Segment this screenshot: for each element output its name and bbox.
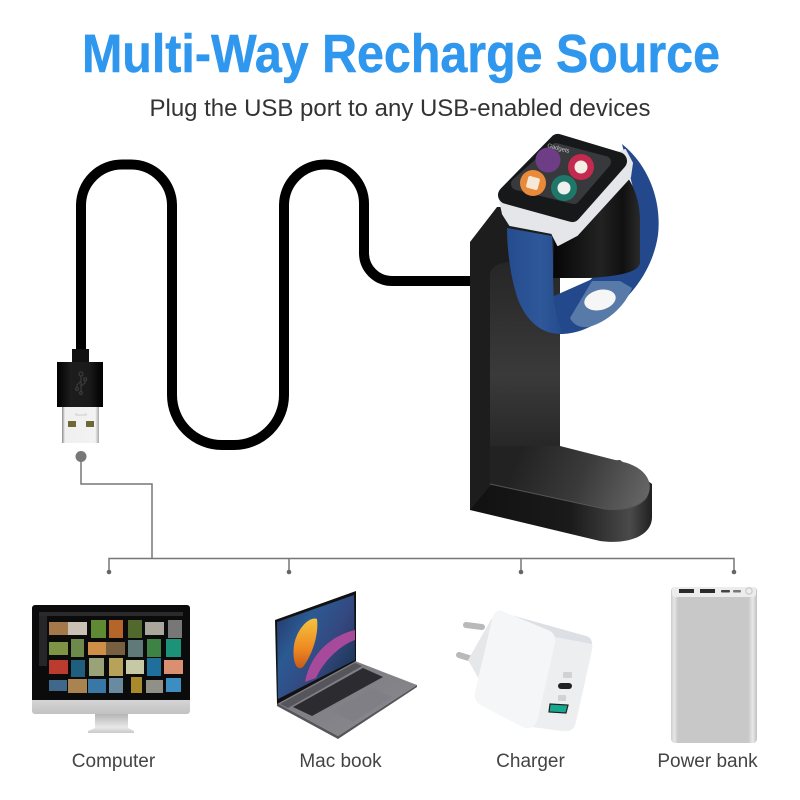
- charger prongs: [459, 625, 482, 659]
- USB-C port: [558, 683, 572, 689]
- screen toolbar and sidebar: [39, 612, 183, 616]
- device: laptop: [275, 591, 417, 739]
- photo thumbnails: [49, 620, 183, 693]
- device: computer: [32, 605, 190, 733]
- USB body: [57, 362, 103, 407]
- USB trident icon: [76, 372, 86, 394]
- blue watch band rear: [545, 144, 659, 334]
- laptop hinge shadow: [280, 663, 362, 708]
- monitor chin: [32, 699, 190, 714]
- micro ports: [721, 590, 730, 592]
- watch silver case: [500, 150, 632, 245]
- label: Power bank: Power bank: [657, 751, 758, 772]
- app icon: hourglass: [536, 148, 560, 172]
- wallpaper swirl: [293, 619, 317, 668]
- label: Mac book: Mac book: [299, 751, 382, 772]
- laptop deck: [277, 661, 417, 736]
- device dots: [107, 570, 736, 574]
- band hole: [582, 286, 618, 314]
- charger side: [500, 612, 592, 731]
- monitor screen: [32, 605, 190, 700]
- laptop wallpaper: [277, 595, 355, 699]
- blue watch band front: [507, 228, 564, 334]
- charger plug base: [468, 618, 500, 681]
- charging stand: [470, 207, 652, 542]
- monitor stand: [88, 714, 134, 733]
- app icon: clock: [551, 175, 577, 201]
- power button: [746, 588, 752, 594]
- power bank body: [671, 587, 757, 743]
- title: Multi-Way Recharge Source: [82, 24, 720, 84]
- USB ports: [679, 589, 694, 593]
- USB metal connector: [62, 406, 99, 443]
- stand column front: [490, 262, 560, 450]
- watch: [500, 143, 632, 245]
- USB plug: [57, 349, 103, 443]
- laptop keyboard: [293, 668, 383, 716]
- label: Computer: Computer: [72, 751, 156, 772]
- USB-A port: [549, 704, 568, 713]
- charger face: [475, 610, 555, 728]
- app icon: checklist: [520, 170, 546, 196]
- device: power bank: [671, 587, 757, 743]
- USB neck: [72, 349, 89, 363]
- charger top: [500, 612, 592, 644]
- device: charger: [459, 610, 592, 731]
- watch screen: [517, 149, 605, 198]
- stand column: [470, 207, 560, 510]
- laptop lid: [275, 591, 356, 704]
- laptop trackpad: [332, 688, 392, 722]
- stand base rim: [470, 460, 652, 542]
- stand foot top: [490, 446, 650, 510]
- band loop with hole: [570, 281, 632, 327]
- label: Charger: Charger: [496, 751, 565, 772]
- subtitle: Plug the USB port to any USB-enabled devices: [150, 95, 650, 122]
- USB cable: [81, 164, 474, 445]
- app icon: stopwatch: [568, 154, 594, 180]
- charging dock puck: [553, 160, 640, 278]
- power bank top edge: [672, 587, 756, 597]
- connector lines: [76, 451, 736, 574]
- source dot: [76, 451, 86, 462]
- screen label: Gadgets: [547, 143, 570, 155]
- port labels: [558, 672, 572, 701]
- watch bezel: [507, 143, 618, 213]
